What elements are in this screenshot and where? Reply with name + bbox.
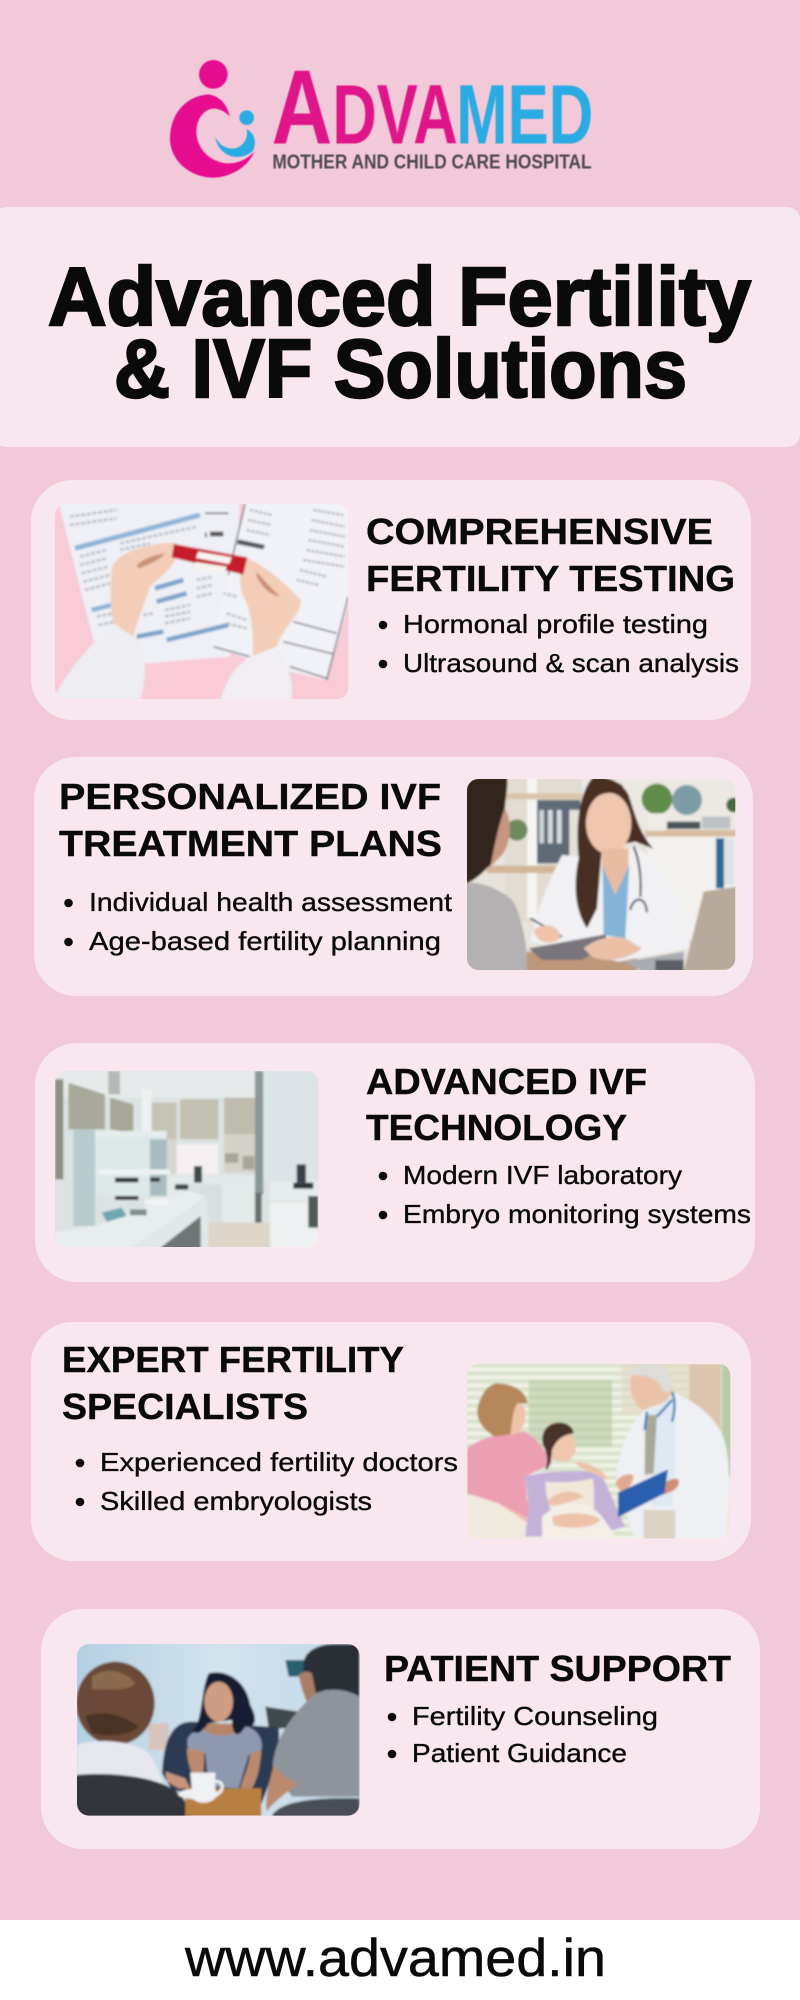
bullet list	[76, 1447, 458, 1516]
title: Advanced Fertility	[48, 250, 751, 343]
photo: hands holding blood tubes over lab reports	[50, 500, 355, 705]
heading	[62, 1339, 404, 1427]
footer: website	[0, 1920, 800, 2000]
bullet list: Hormonal profile testing	[403, 609, 708, 639]
heading	[366, 1061, 647, 1148]
bullet list: Age-based fertility planning	[89, 926, 441, 956]
bullet list: Ultrasound & scan analysis	[403, 648, 739, 678]
website url: www.advamed.in	[184, 1929, 606, 1988]
photo: modern IVF laboratory	[50, 1066, 325, 1252]
heading: PERSONALIZED IVF	[59, 776, 441, 817]
panel: expert fertility specialists	[31, 1322, 751, 1561]
bullet list: Skilled embryologists	[100, 1486, 372, 1516]
wordmark: DVA	[332, 67, 458, 161]
heading: EXPERT FERTILITY	[62, 1339, 404, 1380]
panel: title	[0, 207, 800, 447]
panel: advanced IVF technology	[35, 1043, 755, 1282]
bullet list	[379, 1160, 751, 1229]
bullet list	[388, 1701, 658, 1768]
panel: personalized IVF treatment plans	[34, 757, 753, 996]
panel: patient support	[41, 1609, 760, 1849]
heading: ADVANCED IVF	[366, 1061, 647, 1102]
bullet list	[379, 609, 739, 678]
photo: doctor consulting patient	[462, 775, 742, 975]
bullet list: Embryo monitoring systems	[403, 1199, 751, 1229]
bullet list	[64, 887, 453, 956]
heading	[366, 511, 735, 599]
bullet list: Modern IVF laboratory	[403, 1160, 682, 1190]
heading: COMPREHENSIVE	[366, 511, 713, 552]
heading	[59, 776, 442, 864]
heading: FERTILITY TESTING	[366, 558, 735, 599]
bullet list: Individual health assessment	[89, 887, 453, 917]
wordmark	[272, 48, 593, 166]
bullet list: Patient Guidance	[412, 1738, 627, 1768]
panel: title: & IVF Solutions	[114, 322, 687, 415]
photo: doctor with pregnant patient and companion	[462, 1360, 737, 1545]
icon: mother and child	[170, 60, 255, 178]
bullet list: Fertility Counseling	[412, 1701, 658, 1731]
wordmark: A	[272, 48, 332, 166]
heading: PATIENT SUPPORT	[384, 1648, 731, 1689]
photo: counseling session	[72, 1640, 365, 1820]
tagline: MOTHER AND CHILD CARE HOSPITAL	[272, 151, 592, 173]
bullet list: Experienced fertility doctors	[100, 1447, 458, 1477]
logo: Advamed Mother and Child Care Hospital	[170, 48, 593, 178]
panel: comprehensive fertility testing	[31, 480, 751, 720]
heading: TREATMENT PLANS	[59, 823, 442, 864]
heading: SPECIALISTS	[62, 1386, 308, 1427]
wordmark: MED	[456, 67, 593, 161]
heading: TECHNOLOGY	[366, 1107, 627, 1148]
